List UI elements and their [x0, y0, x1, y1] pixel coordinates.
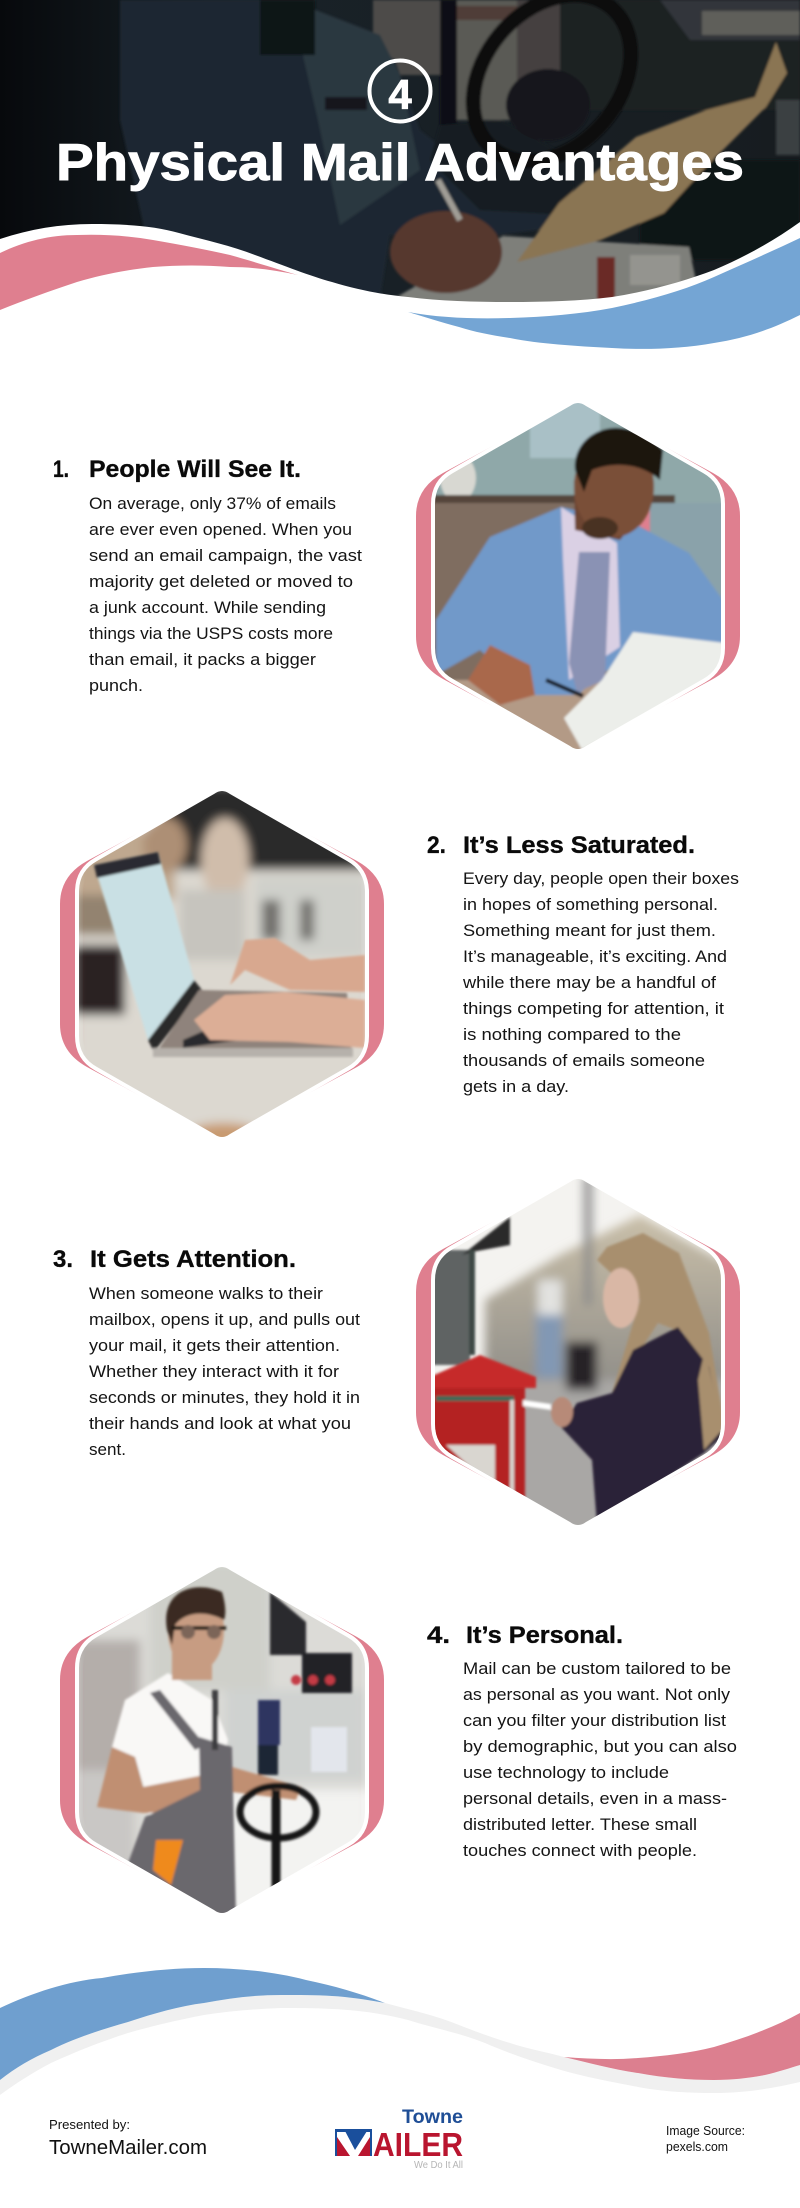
panel: advantage 4 text: touches connect with people.: [463, 1842, 697, 1860]
panel: advantage 1 text: [53, 456, 362, 695]
panel: advantage 4 hexagon photo of warehouse worker: [60, 1560, 384, 1920]
header blue wave: [408, 238, 800, 349]
logo: Towne Mailer: We Do It All: [414, 2160, 463, 2171]
panel: advantage 2 hexagon photo of hands typing on laptop: [60, 785, 384, 1147]
panel: advantage 1 text: 1.: [53, 456, 69, 483]
jacket: [120, 0, 575, 300]
logo: Towne Mailer: [335, 2107, 463, 2171]
panel: advantage 4 text: by demographic, but you can also: [463, 1738, 737, 1756]
panel: advantage 2 text: things competing for attention, it: [463, 1000, 724, 1018]
presented by: TowneMailer.com: [49, 2137, 207, 2159]
panel: advantage 3 text: [53, 1246, 360, 1459]
panel: advantage 4 text: personal details, even in a mass-: [463, 1790, 727, 1808]
panel: advantage 1 text: majority get deleted or moved to: [89, 573, 353, 591]
panel: advantage 4 text: Mail can be custom tailored to be: [463, 1660, 731, 1678]
panel: advantage 4 text: use technology to include: [463, 1764, 669, 1782]
panel: advantage 3 text: mailbox, opens it up, and pulls out: [89, 1311, 360, 1329]
panel: advantage 3 text: It Gets Attention.: [90, 1246, 296, 1273]
panel: advantage 1 hexagon photo of man in blue suit: [416, 398, 740, 755]
header pink wave: [0, 235, 298, 310]
panel: advantage 2 text: thousands of emails someone: [463, 1052, 705, 1070]
image source: Image Source:: [666, 2124, 745, 2138]
panel: advantage 4 text: 4.: [427, 1622, 450, 1649]
panel: advantage 2 text: It’s Less Saturated.: [463, 832, 695, 859]
title: Physical Mail Advantages: [56, 134, 744, 192]
logo: Towne Mailer: Towne: [402, 2107, 463, 2128]
image source: pexels.com: [666, 2140, 728, 2154]
panel: advantage 1 text: punch.: [89, 677, 143, 695]
panel: advantage 2 text: is nothing compared to the: [463, 1026, 681, 1044]
panel: advantage 3 text: 3.: [53, 1246, 73, 1273]
panel: advantage 2 text: 2.: [427, 832, 446, 859]
hand holding pen: [390, 211, 502, 293]
steering wheel: [441, 0, 663, 192]
panel: advantage 1 text: a junk account. While sending: [89, 599, 326, 617]
panel: advantage 3 hexagon photo of woman at red mailbox: [416, 1170, 740, 1535]
header white wave: [0, 222, 800, 360]
panel: advantage 1 text: On average, only 37% of emails: [89, 495, 336, 513]
envelope: [517, 42, 787, 262]
panel: advantage 4 text: as personal as you want. Not only: [463, 1686, 731, 1704]
panel: advantage 2 text: Every day, people open their boxes: [463, 870, 739, 888]
logo: Towne Mailer: AILER: [373, 2126, 463, 2163]
panel: advantage 3 text: their hands and look at what you: [89, 1415, 351, 1433]
presented by: [49, 2117, 207, 2159]
panel: advantage 4 text: It’s Personal.: [466, 1622, 623, 1649]
footer pink wave: [564, 2013, 800, 2080]
panel: advantage 2 text: while there may be a handful of: [462, 974, 716, 992]
icon: circled number 4: [370, 60, 430, 122]
panel: advantage 4 text: can you filter your distribution list: [463, 1712, 726, 1730]
panel: advantage 1 text: People Will See It.: [89, 456, 301, 483]
panel: advantage 3 text: When someone walks to their: [89, 1285, 324, 1303]
presented by: Presented by:: [49, 2117, 130, 2132]
panel: advantage 3 text: Whether they interact with it for: [89, 1363, 340, 1381]
icon: circled number 4: 4: [388, 71, 412, 118]
panel: advantage 2 text: gets in a day.: [463, 1078, 569, 1096]
panel: advantage 4 text: [427, 1622, 737, 1860]
panel: advantage 2 text: It’s manageable, it’s exciting. And: [463, 948, 727, 966]
panel: advantage 1 text: things via the USPS costs more: [89, 625, 333, 643]
panel: advantage 2 text: Something meant for just them.: [463, 922, 716, 940]
paperwork: [395, 236, 700, 315]
panel: advantage 4 text: distributed letter. These small: [463, 1816, 697, 1834]
footer grey wave: [0, 1995, 800, 2095]
panel: advantage 2 text: [427, 832, 739, 1096]
panel: advantage 3 text: sent.: [89, 1441, 126, 1459]
image source: [666, 2124, 745, 2154]
panel: advantage 3 text: seconds or minutes, they hold it in: [89, 1389, 360, 1407]
panel: advantage 1 text: than email, it packs a bigger: [89, 651, 317, 669]
panel: advantage 3 text: your mail, it gets their attention.: [89, 1337, 340, 1355]
panel: advantage 1 text: send an email campaign, the vast: [89, 547, 362, 565]
footer blue wave: [0, 1968, 385, 2080]
panel: advantage 1 text: are ever even opened. When you: [89, 521, 352, 539]
header photo: mail carrier in a vehicle: [0, 0, 800, 340]
panel: advantage 2 text: in hopes of something personal.: [463, 896, 718, 914]
